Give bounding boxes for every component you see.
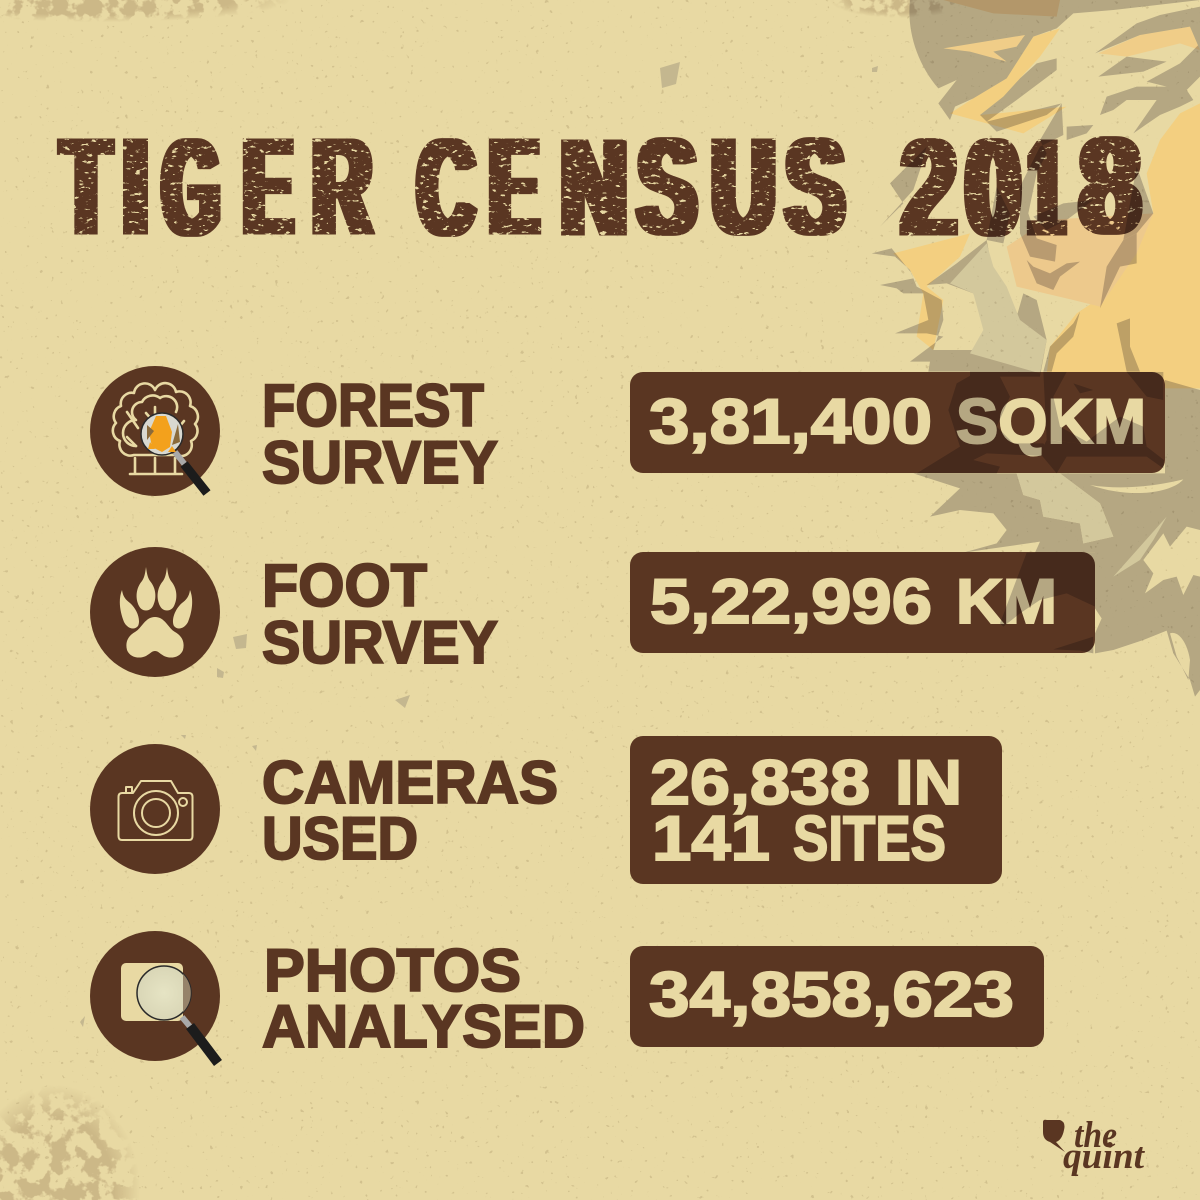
panel: cameras value: 141 [652, 804, 770, 874]
label: photos analysed [262, 937, 585, 1060]
logo: the quint [1043, 1115, 1146, 1177]
panel: foot survey value: 5,22,996 [650, 567, 932, 637]
title: I [123, 110, 148, 264]
label: cameras used: USED [262, 805, 418, 872]
tiger orange fill [893, 0, 1200, 388]
label: forest survey: FOREST [262, 372, 484, 439]
icon: magnifier with tiger [141, 413, 207, 493]
panel: forest survey value [630, 372, 1165, 473]
label: forest survey: SURVEY [262, 429, 498, 496]
label: cameras used [262, 749, 558, 872]
panel: foot survey value [630, 552, 1095, 653]
title: N [561, 111, 627, 265]
panel: photos value: 34,858,623 [649, 960, 1014, 1030]
title: 8 [1080, 109, 1140, 263]
title: T [62, 110, 110, 264]
paper blotches [80, 62, 878, 1027]
label: photos analysed: PHOTOS [264, 937, 521, 1004]
label: foot survey: FOOT [262, 552, 427, 619]
panel: cameras value: SITES [793, 804, 946, 874]
title: E [490, 110, 538, 264]
title [62, 109, 1140, 265]
corner grunge [0, 0, 954, 1200]
title: C [418, 111, 474, 265]
label: forest survey [262, 372, 498, 496]
tiger silhouette overlay [872, 0, 1200, 697]
label: foot survey: SURVEY [262, 609, 498, 676]
title: 0 [966, 111, 1020, 265]
panel: foot survey value: KM [956, 567, 1057, 637]
label: photos analysed: ANALYSED [262, 993, 585, 1060]
icon: magnifier [137, 966, 218, 1063]
title: 1 [1029, 111, 1063, 265]
title: S [638, 110, 696, 264]
panel: cameras value: 26,838 [650, 748, 870, 818]
title: R [313, 110, 371, 264]
title: 2 [902, 111, 956, 265]
panel: cameras value [630, 736, 1002, 884]
panel: photos value [630, 946, 1044, 1047]
logo: the quint: the [1074, 1115, 1117, 1156]
title: G [163, 111, 219, 265]
title: U [712, 110, 775, 264]
panel: forest survey value: 3,81,400 [649, 387, 932, 457]
icon: camera [90, 744, 220, 874]
title: E [244, 110, 292, 264]
panel: cameras value: IN [895, 748, 962, 818]
label: foot survey [262, 552, 498, 676]
icon: paw [90, 547, 220, 677]
label: cameras used: CAMERAS [262, 749, 558, 816]
title: S [786, 110, 844, 264]
icon: photos analysed [90, 931, 220, 1063]
panel: forest survey value: SQKM [956, 387, 1146, 457]
icon: forest survey [90, 366, 220, 496]
logo: the quint: quint [1063, 1136, 1146, 1177]
